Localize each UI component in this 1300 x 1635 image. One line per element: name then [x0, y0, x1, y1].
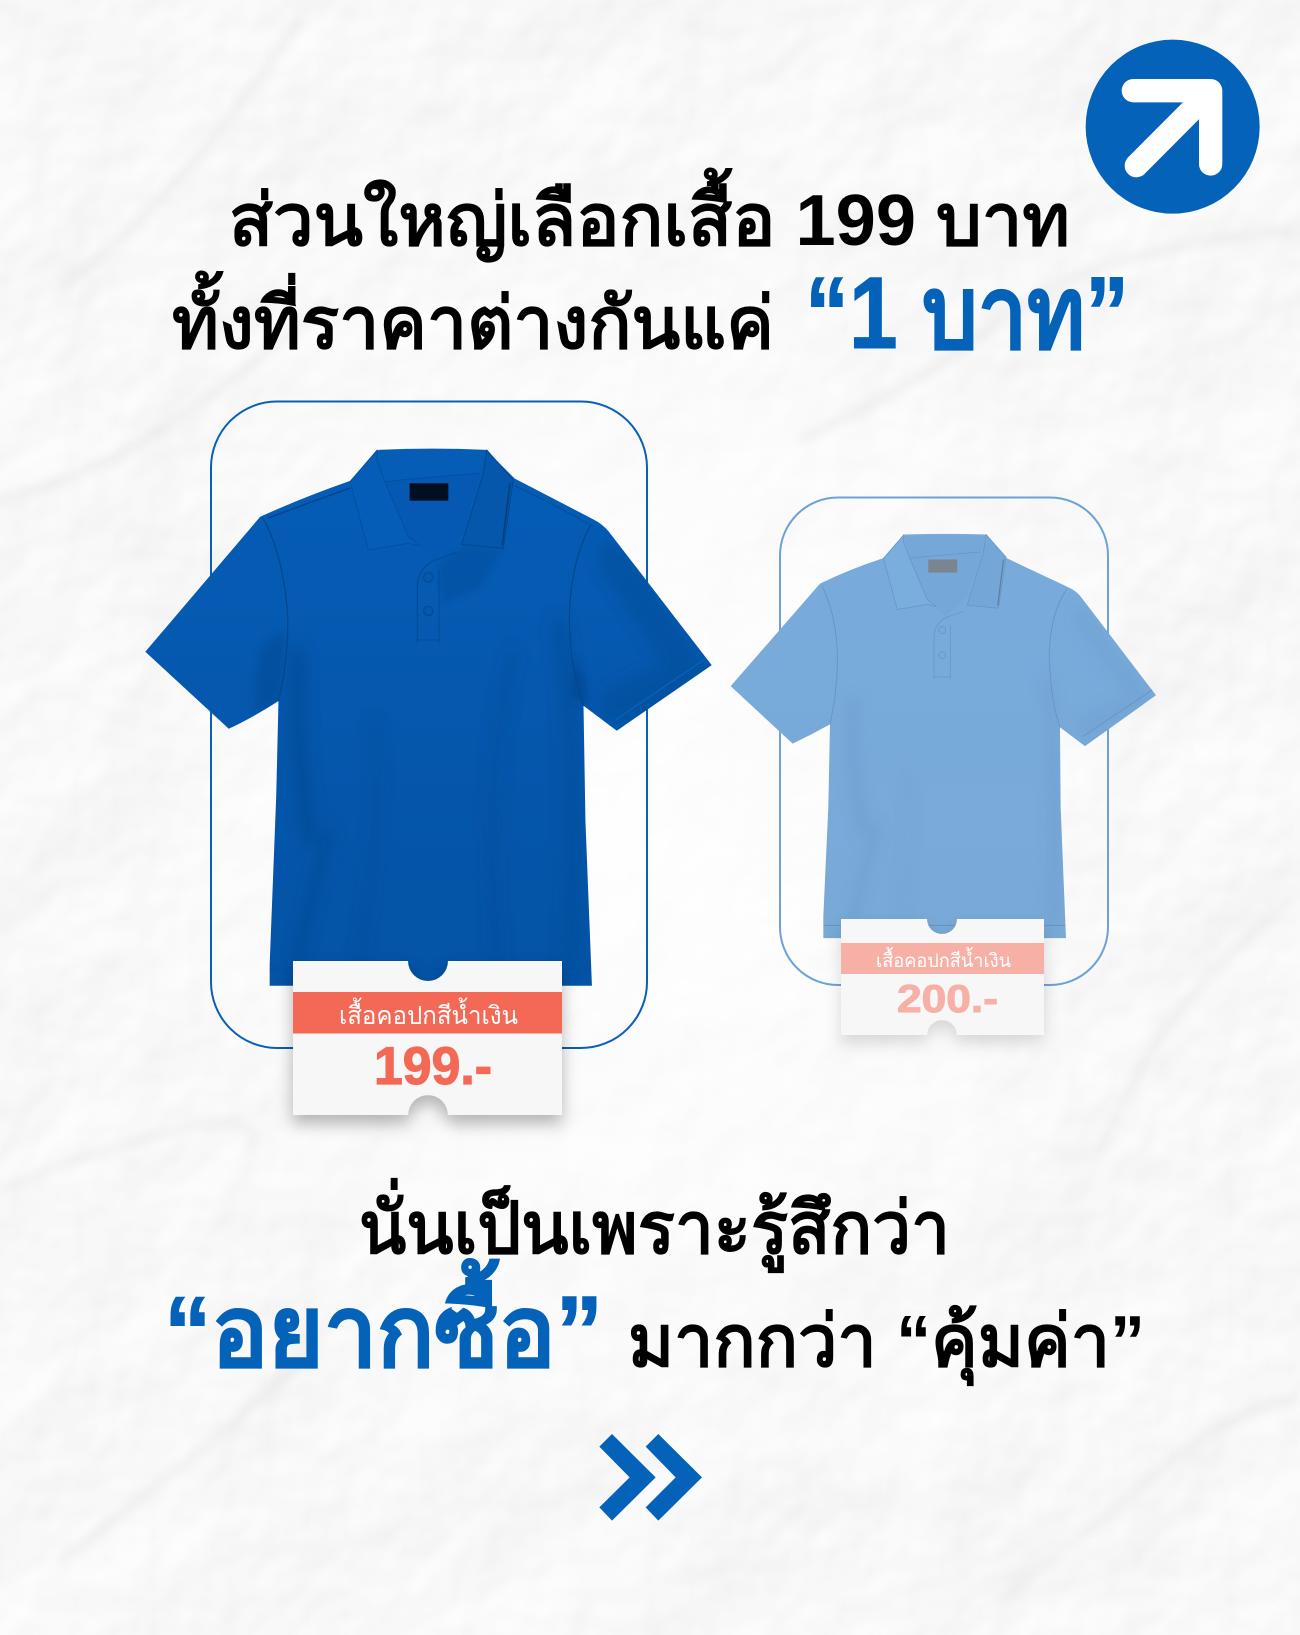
faded buttons	[939, 626, 946, 634]
faded neck tag	[928, 560, 957, 572]
faded neck interior	[905, 536, 986, 617]
panel: 200 baht card outline	[780, 498, 1108, 985]
left collar flap	[350, 450, 420, 550]
faded collar, placket and tag	[884, 534, 1006, 680]
faded ticket band	[841, 943, 1044, 974]
collar, placket and tag	[350, 450, 513, 643]
faded ticket label: เสื้อคอปกสีน้ำเงิน	[876, 947, 1011, 972]
icon: double chevron arrow	[599, 1434, 702, 1521]
sleeve seams	[262, 486, 710, 969]
placket	[417, 553, 457, 643]
price tag: 200 baht	[841, 919, 1044, 1035]
closing statement	[164, 1177, 1145, 1388]
illustration: faded light blue polo shirt	[731, 534, 1156, 938]
panel: 199 baht card outline	[211, 402, 647, 1048]
closing line 2: มากกว่า “คุ้มค่า”	[628, 1302, 1145, 1387]
closing highlight: “อยากซื้อ”	[164, 1258, 603, 1388]
ticket shape	[293, 961, 562, 1115]
faded ticket shape	[841, 919, 1044, 1035]
faded left collar flap	[884, 534, 936, 610]
ticket label: เสื้อคอปกสีน้ำเงิน	[339, 997, 518, 1030]
chest shadow	[438, 545, 503, 603]
closing line 1: นั่นเป็นเพราะรู้สึกว่า	[359, 1177, 950, 1274]
title	[172, 167, 1129, 370]
price tag: 199 baht	[293, 961, 562, 1115]
ticket price: 199.-	[374, 1037, 492, 1096]
right collar flap	[462, 450, 513, 548]
faded ticket price: 200.-	[897, 978, 998, 1021]
illustration: dark blue polo shirt	[145, 449, 712, 986]
left sleeve fold	[255, 635, 285, 715]
faded placket	[934, 612, 964, 680]
title highlight: “1 บาท”	[805, 256, 1129, 370]
icon: arrow in circle	[1086, 40, 1260, 214]
buttons	[424, 573, 433, 582]
title line 2: ทั้งที่ราคาต่างกันแค่	[172, 270, 774, 364]
neck tag	[410, 483, 448, 501]
neck interior	[378, 452, 487, 560]
title line 1: ส่วนใหญ่เลือกเสื้อ 199 บาท	[229, 167, 1070, 263]
faded shirt seams	[822, 585, 1153, 925]
faded right collar flap	[967, 534, 1006, 608]
ticket band	[293, 992, 562, 1034]
